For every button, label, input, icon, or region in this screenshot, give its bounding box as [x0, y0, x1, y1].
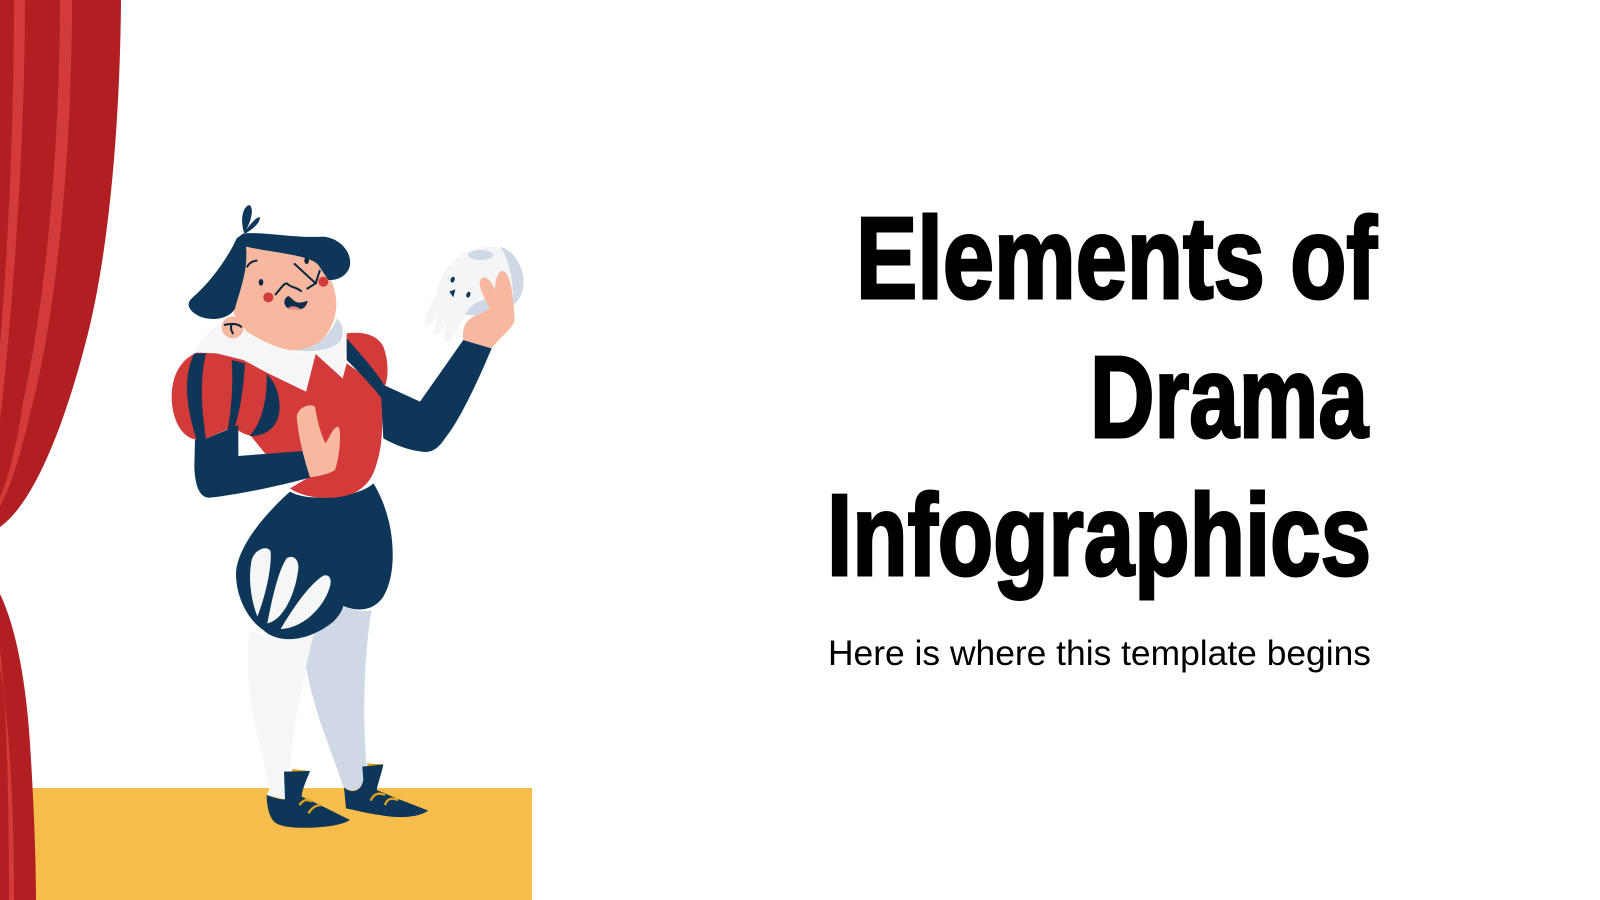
raised arm	[380, 340, 492, 452]
character upper body	[172, 205, 524, 498]
title: Elements of	[856, 193, 1377, 323]
bottom curtain	[0, 594, 36, 900]
right leg	[306, 607, 372, 790]
title: Drama	[1090, 332, 1369, 462]
right shoe	[344, 763, 428, 817]
torso	[250, 354, 382, 498]
face details	[224, 257, 328, 334]
forearm	[194, 425, 311, 498]
ear	[222, 316, 244, 338]
skull	[425, 247, 524, 343]
stage floor	[30, 788, 532, 900]
left shoe	[267, 769, 350, 828]
title: Infographics	[827, 470, 1371, 600]
shoulder strap	[347, 338, 383, 397]
subtitle: Here is where this template begins	[828, 634, 1371, 673]
puffed sleeve	[172, 353, 281, 440]
title	[827, 193, 1377, 600]
collar	[195, 323, 347, 392]
hair	[189, 233, 350, 319]
face	[233, 245, 336, 351]
back shoulder	[347, 333, 388, 397]
character: actor holding skull	[172, 205, 524, 828]
feather	[242, 205, 260, 233]
shorts petals	[250, 548, 331, 629]
raised hand	[463, 271, 515, 348]
character legs and shorts	[236, 483, 428, 828]
hand on chest	[297, 405, 340, 477]
shorts	[236, 483, 393, 639]
top curtain	[0, 0, 121, 527]
neck shadow	[293, 318, 343, 351]
gap under arm	[238, 431, 265, 456]
left leg	[248, 630, 315, 799]
